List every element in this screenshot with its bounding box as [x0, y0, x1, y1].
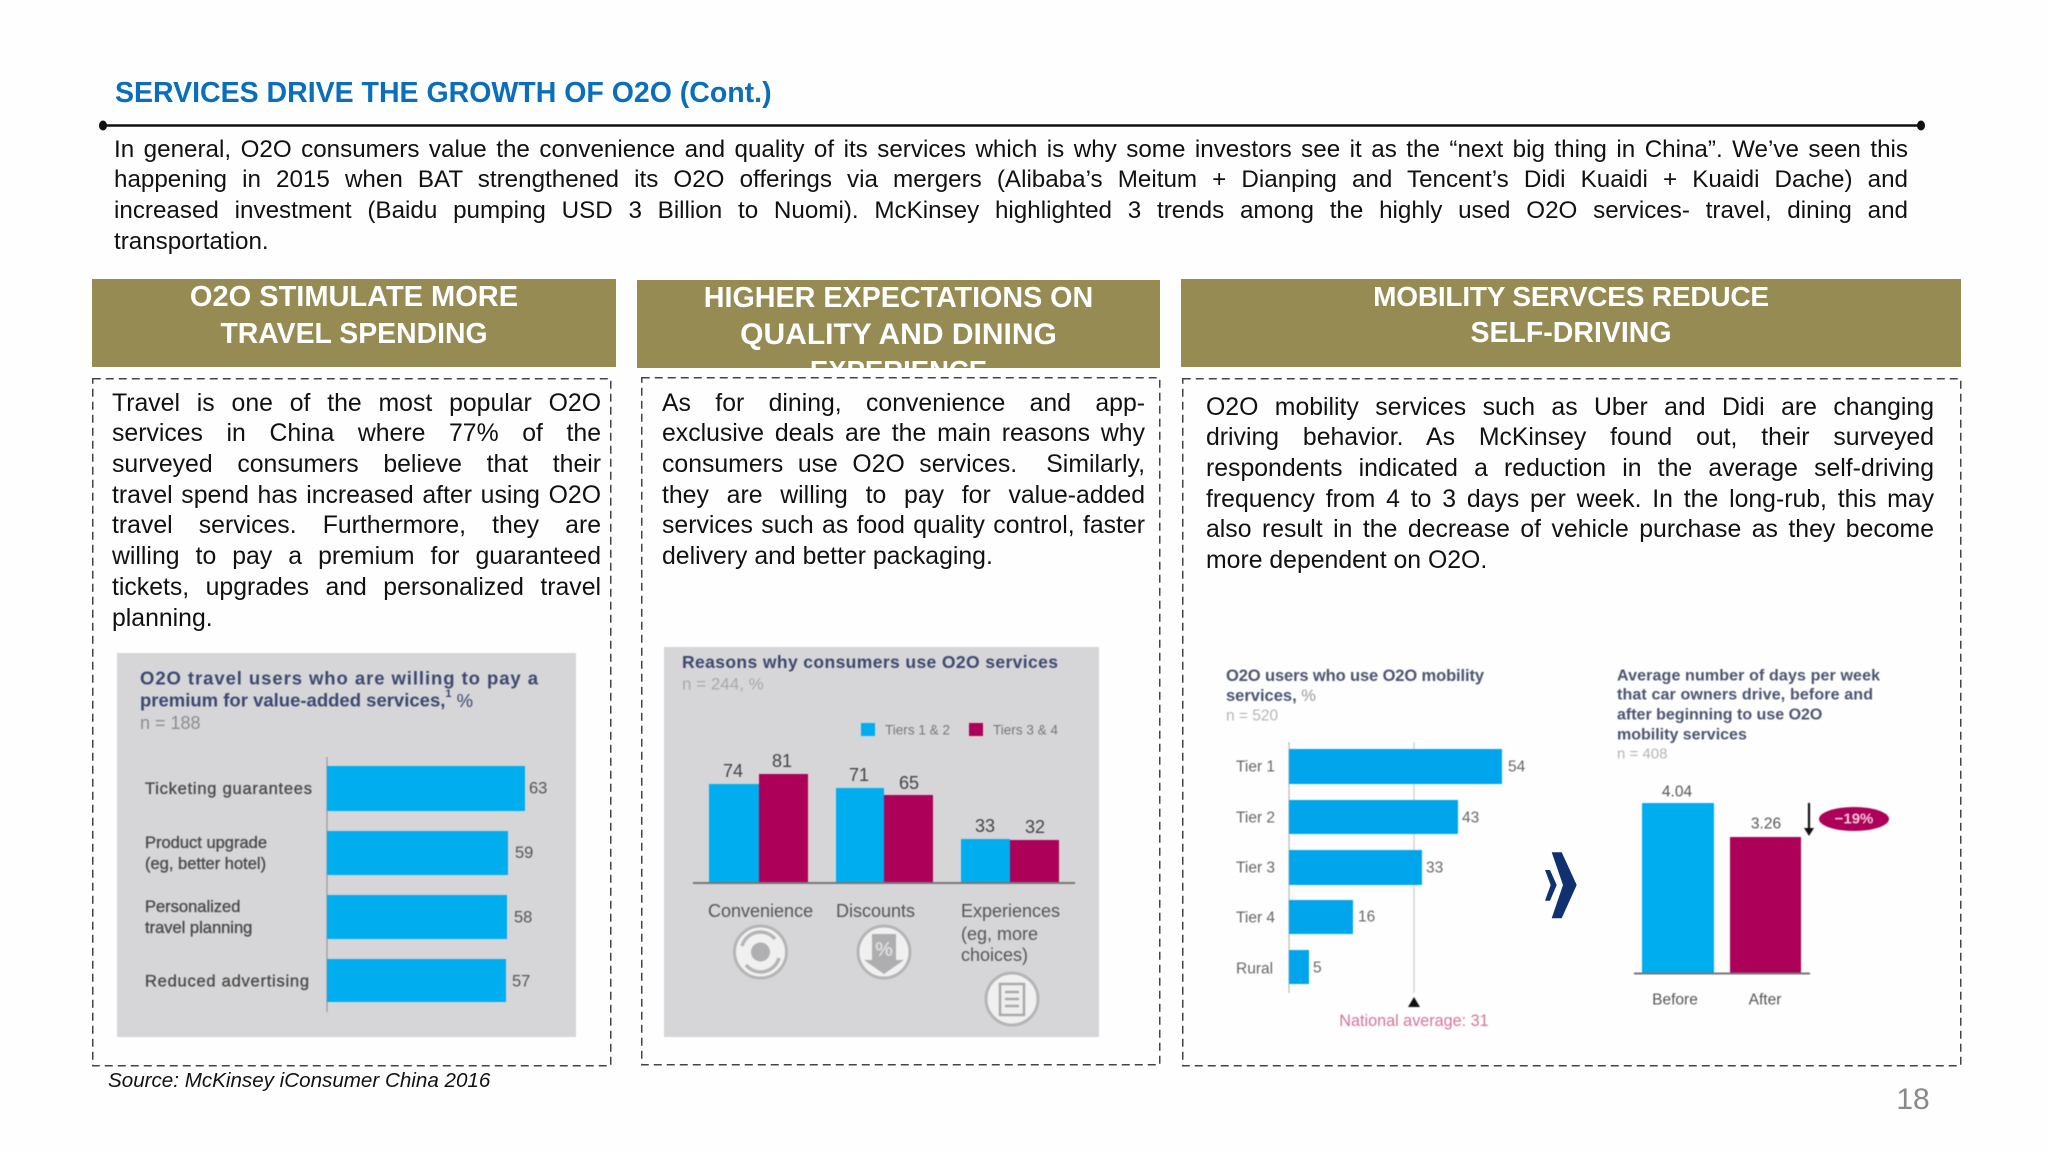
- title: SERVICES DRIVE THE GROWTH OF O2O (Cont.): [115, 77, 772, 109]
- travel text block: willing to pay a premium for guaranteed: [112, 543, 601, 570]
- panel: dining: [637, 280, 1160, 1066]
- bar chart: O2O mobility users by tier: 5: [1313, 960, 1322, 976]
- mobility text block: frequency from 4 to 3 days per week. In the long-rub, this may: [1206, 486, 1934, 513]
- panel heading: dining: HIGHER EXPECTATIONS ON: [704, 282, 1093, 314]
- dining text block: they are willing to pay for value-added: [662, 482, 1145, 509]
- grouped bar chart: reasons consumers use O2O: n = 244, %: [682, 674, 764, 694]
- grouped bar chart: reasons consumers use O2O: Tiers 1 & 2: [885, 722, 950, 738]
- bar chart: O2O mobility users by tier: National average: 31: [1339, 1012, 1489, 1030]
- bar chart: driving days before and after: After: [1749, 992, 1781, 1008]
- panel: mobility: [1181, 279, 1962, 1066]
- bar chart: O2O mobility users by tier: Tier 4: [1236, 910, 1275, 926]
- panel heading: mobility: [1181, 279, 1961, 367]
- dashed panel border: [641, 377, 1160, 1066]
- bar chart: driving days before and after: Before: [1652, 992, 1698, 1008]
- bar chart: O2O mobility users by tier: Rural: [1236, 960, 1273, 978]
- travel text block: tickets, upgrades and personalized travel: [112, 574, 601, 601]
- page number: 18: [1896, 1083, 1930, 1116]
- bar chart: O2O mobility users by tier: O2O users who use O2O mobility: [1226, 667, 1485, 685]
- panel heading: travel: O2O STIMULATE MORE: [190, 281, 518, 313]
- bar chart: premium for value-added services: O2O travel users who are willing to pay a: [140, 668, 539, 688]
- source note: Source: McKinsey iConsumer China 2016: [108, 1069, 490, 1092]
- bar chart: O2O mobility users by tier: services, %: [1226, 687, 1316, 705]
- dining text block: [662, 390, 1145, 570]
- grouped bar chart: reasons consumers use O2O: 74: [723, 761, 743, 781]
- bar chart: driving days before and after: that car owners drive, before and: [1617, 686, 1873, 704]
- travel text block: [112, 390, 601, 632]
- mobility text block: driving behavior. As McKinsey found out, their surveyed: [1206, 424, 1934, 451]
- grouped bar chart: reasons consumers use O2O: [664, 646, 1100, 1038]
- panel heading: dining: [637, 280, 1160, 368]
- icon: convenience cycle: [734, 926, 786, 978]
- panel heading: travel: [92, 279, 616, 367]
- bar chart: premium for value-added services: n = 188: [140, 713, 201, 733]
- bar chart: driving days before and after: −19%: [1835, 810, 1873, 828]
- dashed panel border: [92, 378, 612, 1066]
- intro text block: happening in 2015 when BAT strengthened its O2O offerings via mergers (Alibaba’s Meitum + Dianping and Tencent’s Didi Kuaidi + Kuaidi Dache) and: [114, 166, 1908, 193]
- intro text block: increased investment (Baidu pumping USD 3 Billion to Nuomi). McKinsey highlighted 3 trends among the highly used O2O services- travel, dining and: [114, 197, 1908, 224]
- bar chart: O2O mobility users by tier: n = 520: [1226, 708, 1279, 724]
- bar chart: premium for value-added services: travel planning: [145, 919, 252, 937]
- mobility text block: O2O mobility services such as Uber and Didi are changing: [1206, 394, 1934, 420]
- panel heading: mobility: MOBILITY SERVCES REDUCE: [1373, 281, 1769, 312]
- bar chart: premium for value-added services: 59: [515, 844, 533, 862]
- panel heading: mobility: SELF-DRIVING: [1470, 317, 1672, 349]
- bar chart: driving days before and after: mobility services: [1617, 726, 1747, 744]
- bar chart: O2O mobility users by tier: Tier 3: [1236, 860, 1275, 876]
- grouped bar chart: reasons consumers use O2O: Reasons why consumers use O2O services: [682, 652, 1058, 672]
- bar chart: premium for value-added services: Reduced advertising: [145, 972, 309, 990]
- intro text block: transportation.: [114, 228, 269, 255]
- grouped bar chart: reasons consumers use O2O: 81: [772, 751, 792, 771]
- icon: menu list: [986, 973, 1038, 1025]
- arrow: double chevron: [1545, 852, 1577, 918]
- mobility text block: more dependent on O2O.: [1206, 547, 1487, 574]
- mobility text block: respondents indicated a reduction in the average self-driving: [1206, 455, 1934, 482]
- bar chart: premium for value-added services: 57: [512, 972, 530, 990]
- icon: discount arrow: %: [875, 939, 893, 961]
- bar chart: premium for value-added services: premium for value-added services,: [140, 690, 445, 710]
- bar chart: O2O mobility users by tier: Tier 2: [1236, 810, 1275, 826]
- bar chart: O2O mobility users by tier: 16: [1358, 908, 1375, 926]
- bar chart: driving days before and after: 4.04: [1662, 784, 1692, 800]
- bar chart: premium for value-added services: 63: [529, 780, 547, 798]
- bar chart: premium for value-added services: Product upgrade: [145, 834, 267, 852]
- bar chart: premium for value-added services: %: [452, 690, 473, 710]
- bar chart: driving days before and after: Average number of days per week: [1617, 668, 1880, 684]
- travel text block: travel services. Furthermore, they are: [112, 512, 601, 539]
- bar chart: O2O mobility users by tier: 33: [1426, 860, 1443, 876]
- grouped bar chart: reasons consumers use O2O: Tiers 3 & 4: [993, 722, 1058, 738]
- travel text block: travel spend has increased after using O2O: [112, 482, 601, 509]
- panel heading: dining: QUALITY AND DINING: [740, 318, 1057, 350]
- icon: discount arrow: [858, 926, 910, 978]
- grouped bar chart: reasons consumers use O2O: 33: [975, 816, 995, 836]
- bar chart: O2O mobility users by tier: 43: [1462, 810, 1479, 826]
- bar chart: O2O mobility users by tier: [1226, 667, 1526, 1030]
- bar chart: premium for value-added services: Ticketing guarantees: [145, 780, 312, 798]
- grouped bar chart: reasons consumers use O2O: 65: [899, 773, 919, 793]
- bar chart: premium for value-added services: Personalized: [145, 898, 240, 916]
- dining text block: services such as food quality control, faster: [662, 512, 1145, 539]
- dining text block: As for dining, convenience and app-: [662, 390, 1145, 417]
- travel text block: Travel is one of the most popular O2O: [112, 390, 601, 417]
- grouped bar chart: reasons consumers use O2O: Discounts: [836, 901, 915, 921]
- grouped bar chart: reasons consumers use O2O: Convenience: [708, 901, 813, 921]
- grouped bar chart: reasons consumers use O2O: Experiences: [961, 901, 1060, 921]
- mobility text block: also result in the decrease of vehicle purchase as they become: [1206, 516, 1934, 543]
- bar chart: driving days before and after: [1616, 668, 1890, 1008]
- panel heading: travel: TRAVEL SPENDING: [220, 318, 488, 350]
- bar chart: driving days before and after: n = 408: [1617, 746, 1667, 762]
- bar chart: premium for value-added services: (eg, better hotel): [145, 855, 266, 873]
- panel: travel spending: [92, 279, 616, 1066]
- dining text block: delivery and better packaging.: [662, 543, 993, 570]
- dining text block: consumers use O2O services. Similarly,: [662, 451, 1145, 478]
- bar chart: O2O mobility users by tier: 54: [1508, 758, 1526, 776]
- travel text block: surveyed consumers believe that their: [112, 451, 601, 478]
- grouped bar chart: reasons consumers use O2O: choices): [961, 945, 1028, 965]
- dashed panel border: [1182, 378, 1962, 1066]
- intro text block: [114, 136, 1908, 255]
- grouped bar chart: reasons consumers use O2O: 71: [849, 765, 869, 785]
- grouped bar chart: reasons consumers use O2O: (eg, more: [961, 924, 1038, 944]
- dining text block: exclusive deals are the main reasons why: [662, 420, 1145, 447]
- bar chart: driving days before and after: 3.26: [1751, 816, 1781, 832]
- intro text block: In general, O2O consumers value the convenience and quality of its services which is why some investors see it as the “next big thing in China”. We’ve seen this: [114, 136, 1908, 163]
- mobility text block: [1206, 394, 1934, 574]
- grouped bar chart: reasons consumers use O2O: 32: [1025, 817, 1045, 837]
- travel text block: planning.: [112, 604, 213, 632]
- bar chart: O2O mobility users by tier: Tier 1: [1236, 758, 1275, 776]
- bar chart: driving days before and after: after beginning to use O2O: [1617, 706, 1822, 724]
- travel text block: services in China where 77% of the: [112, 420, 601, 447]
- title rule with end dots: [99, 120, 1925, 130]
- bar chart: premium for value-added services: 1: [445, 688, 452, 700]
- bar chart: premium for value-added services: [116, 652, 576, 1038]
- panel: dining: EXPERIENCE: [810, 355, 987, 386]
- bar chart: premium for value-added services: 58: [514, 908, 532, 926]
